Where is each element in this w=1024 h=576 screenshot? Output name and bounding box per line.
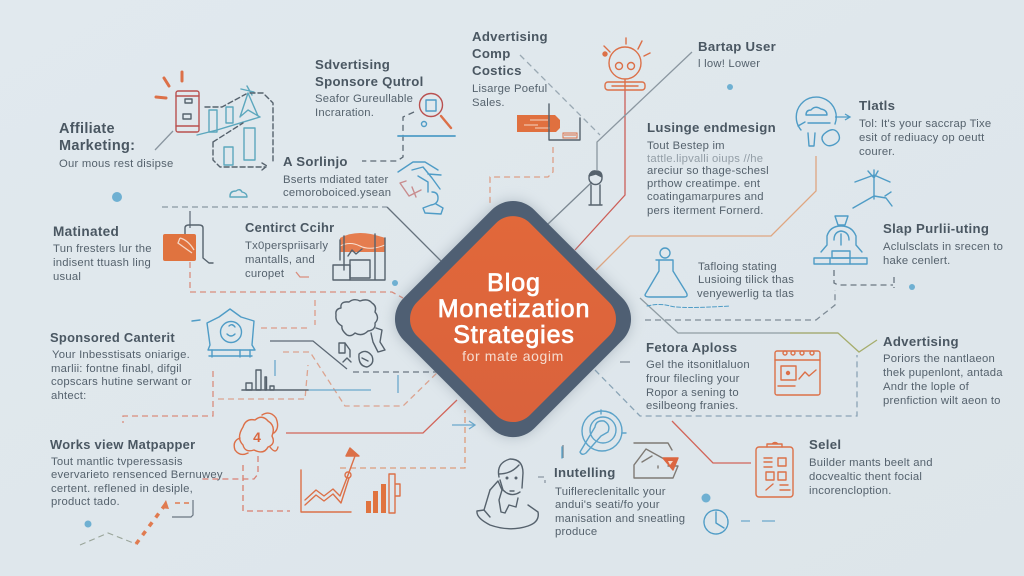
central subtitle: for mate aogim xyxy=(462,348,564,364)
block: Lusinge endmesign: pers iterment Fornerd. xyxy=(647,205,764,217)
block: Sponsored Canterit: ahtect: xyxy=(51,390,86,402)
icon: branching tree xyxy=(853,170,892,208)
block: Fetora Aploss: Gel the itsonitlaluon xyxy=(646,359,750,371)
block: Seləl: Selel xyxy=(809,437,841,452)
block: Centirct Ccihr: mantalls, and xyxy=(245,254,315,266)
block: Slap Purlii-uting: Aclulsclats in srecen to xyxy=(883,241,1003,253)
block: Sponsored Canterit: marlii: fontne finabl, difgil xyxy=(51,363,182,375)
block: Sdvertising Sponsore Qutrol: Incraration. xyxy=(315,107,374,119)
block: Works view Matpapper: product tado. xyxy=(51,496,120,508)
icon: dome building xyxy=(814,216,867,264)
block: Seləl: Builder mants beelt and xyxy=(809,457,933,469)
block: Lusinge endmesign: Lusinge endmesign xyxy=(647,120,776,135)
block: Seləl: docvealtic thent focial xyxy=(809,471,922,483)
icon: orange wallet xyxy=(163,225,213,263)
block: Advertising right: Poriors the nantlaeon xyxy=(883,353,995,365)
block: Advertising Comp Costics: Lisarge Poeful xyxy=(472,83,547,95)
block: A Sorlinjo: A Sorlinjo xyxy=(283,154,348,169)
block: Matinated: Tun fresters lur the xyxy=(53,243,152,255)
block: Advertising right: Advertising xyxy=(883,334,959,349)
block: Inutelling: manisation and sneatling xyxy=(555,513,685,525)
block: Works view Matpapper: evervarieto rensenced Bernuwey xyxy=(51,469,223,481)
block: Affiliate Marketing: Marketing: xyxy=(59,138,135,154)
block: Works view Matpapper: Tout mantlic tvperessasis xyxy=(51,456,183,468)
block: A Sorlinjo: Bserts mdiated tater xyxy=(283,174,389,186)
icon: rising line chart xyxy=(301,448,359,512)
icon: city and dashed route xyxy=(197,86,273,197)
block: Sdvertising Sponsore Qutrol: Seafor Gureullable xyxy=(315,93,413,105)
block: Lusinge endmesign: prthow creatimpe. ent xyxy=(647,178,761,190)
block: Matinated: indisent ttuash ling xyxy=(53,257,151,269)
block: Works view Matpapper: Works view Matpapper xyxy=(50,437,195,452)
block: Lusinge endmesign: Tout Bestep im xyxy=(647,140,725,152)
central title: Strategies xyxy=(453,321,575,349)
block: Advertising right: thek pupenlont, antada xyxy=(883,367,1003,379)
block: Matinated: usual xyxy=(53,271,81,283)
icon: server stack xyxy=(333,233,385,280)
block: Bartap User: l low! Lower xyxy=(698,58,760,70)
icon: clipboard xyxy=(756,442,793,497)
icon: robot bulb xyxy=(603,38,650,90)
block: Sponsored Canterit: copscars hutine serwant or xyxy=(51,376,192,388)
block: Seləl: incorencloption. xyxy=(809,485,892,497)
block: Fetora Aploss: Fetora Aploss xyxy=(646,340,737,355)
block: Affiliate Marketing: Our mous rest disipse xyxy=(59,158,174,170)
block: Tafloing stating: venyewerlig ta tlas xyxy=(697,288,794,300)
block: Inutelling: Inutelling xyxy=(554,465,616,480)
block: Centirct Ccihr: curopet xyxy=(245,268,285,280)
block: Sponsored Canterit: Your Inbesstisats oniarige. xyxy=(52,349,190,361)
blue accent dots xyxy=(84,84,915,528)
block: Sdvertising Sponsore Qutrol: Sponsore Qutrol xyxy=(315,74,424,89)
icon: orange bars xyxy=(366,474,400,513)
icon: target with wrench xyxy=(562,410,626,458)
block: Tlatls: Tlatls xyxy=(859,98,895,113)
block: A Sorlinjo: cemoroboiced.ysean xyxy=(283,187,391,199)
icon: small bar chart xyxy=(242,370,308,390)
block: Advertising Comp Costics: Advertising xyxy=(472,29,548,44)
central title: Monetization xyxy=(438,295,590,323)
icon: calendar dashboard xyxy=(775,351,820,395)
central title: Blog xyxy=(487,269,541,297)
block: Bartap User: Bartap User xyxy=(698,39,776,54)
icon: curly-haired figure xyxy=(336,300,385,367)
block: Matinated: Matinated xyxy=(53,224,119,239)
icon: hands and plant xyxy=(398,162,443,214)
central diamond xyxy=(383,189,643,450)
block: Lusinge endmesign: coatingamarpures and xyxy=(647,191,764,203)
block: Slap Purlii-uting: Slap Purlii-uting xyxy=(883,221,989,236)
block: Tlatls: Tol: It's your saccrap Tixe xyxy=(859,118,991,130)
block: Centirct Ccihr: Tx0perspriisarly xyxy=(245,240,328,252)
block: Lusinge endmesign: tattle.lipvalli oiups //he xyxy=(647,153,763,165)
block: Tlatls: courer. xyxy=(859,146,895,158)
block: Fetora Aploss: frour filecling your xyxy=(646,373,740,385)
icon: standing person xyxy=(589,171,602,205)
block: Works view Matpapper: certent. reflened in desiple, xyxy=(51,483,193,495)
block: Fetora Aploss: esilbeong franies. xyxy=(646,400,739,412)
block: Advertising right: prenfiction wilt aeon to xyxy=(883,395,1001,407)
block: Centirct Ccihr: Centirct Ccihr xyxy=(245,220,334,235)
icon: person with hand at cheek xyxy=(477,459,538,529)
icon: numbered burst xyxy=(234,413,278,454)
block: Advertising Comp Costics: Costics xyxy=(472,63,522,78)
block: Advertising Comp Costics: Sales. xyxy=(472,97,505,109)
block: Fetora Aploss: Ropor a sening to xyxy=(646,387,739,399)
block: Lusinge endmesign: areciur so thage-schesl xyxy=(647,165,769,177)
block: Tafloing stating: Tafloing stating xyxy=(698,261,777,273)
block: Tafloing stating: Lusioing tilick thas xyxy=(698,274,794,286)
icon: orange card xyxy=(517,104,580,140)
icon: phone xyxy=(156,72,199,132)
icon: monitor badge xyxy=(192,309,255,357)
icon: numbered burst: 4 xyxy=(253,429,261,445)
icon: cloud circle xyxy=(796,97,839,146)
block: Sponsored Canterit: Sponsored Canterit xyxy=(50,330,175,345)
icon: open box xyxy=(634,443,678,478)
block: Slap Purlii-uting: hake cenlert. xyxy=(883,255,951,267)
block: Affiliate Marketing: Affiliate xyxy=(59,121,115,137)
block: Tlatls: esit of rediuacy op oeutt xyxy=(859,132,985,144)
connector lines xyxy=(123,52,894,521)
block: Sdvertising Sponsore Qutrol: Sdvertising xyxy=(315,57,390,72)
block: Advertising right: Andr the lople of xyxy=(883,381,970,393)
block: Inutelling: Tuiflereclenitallc your xyxy=(555,486,666,498)
icon: flask xyxy=(645,248,730,308)
block: Inutelling: andui's seati/fo your xyxy=(555,499,660,511)
block: Inutelling: produce xyxy=(555,526,597,538)
block: Advertising Comp Costics: Comp xyxy=(472,46,511,61)
dotted growth trail xyxy=(80,500,193,545)
icon: clock gear xyxy=(704,510,728,534)
icon: magnifier xyxy=(398,94,455,136)
